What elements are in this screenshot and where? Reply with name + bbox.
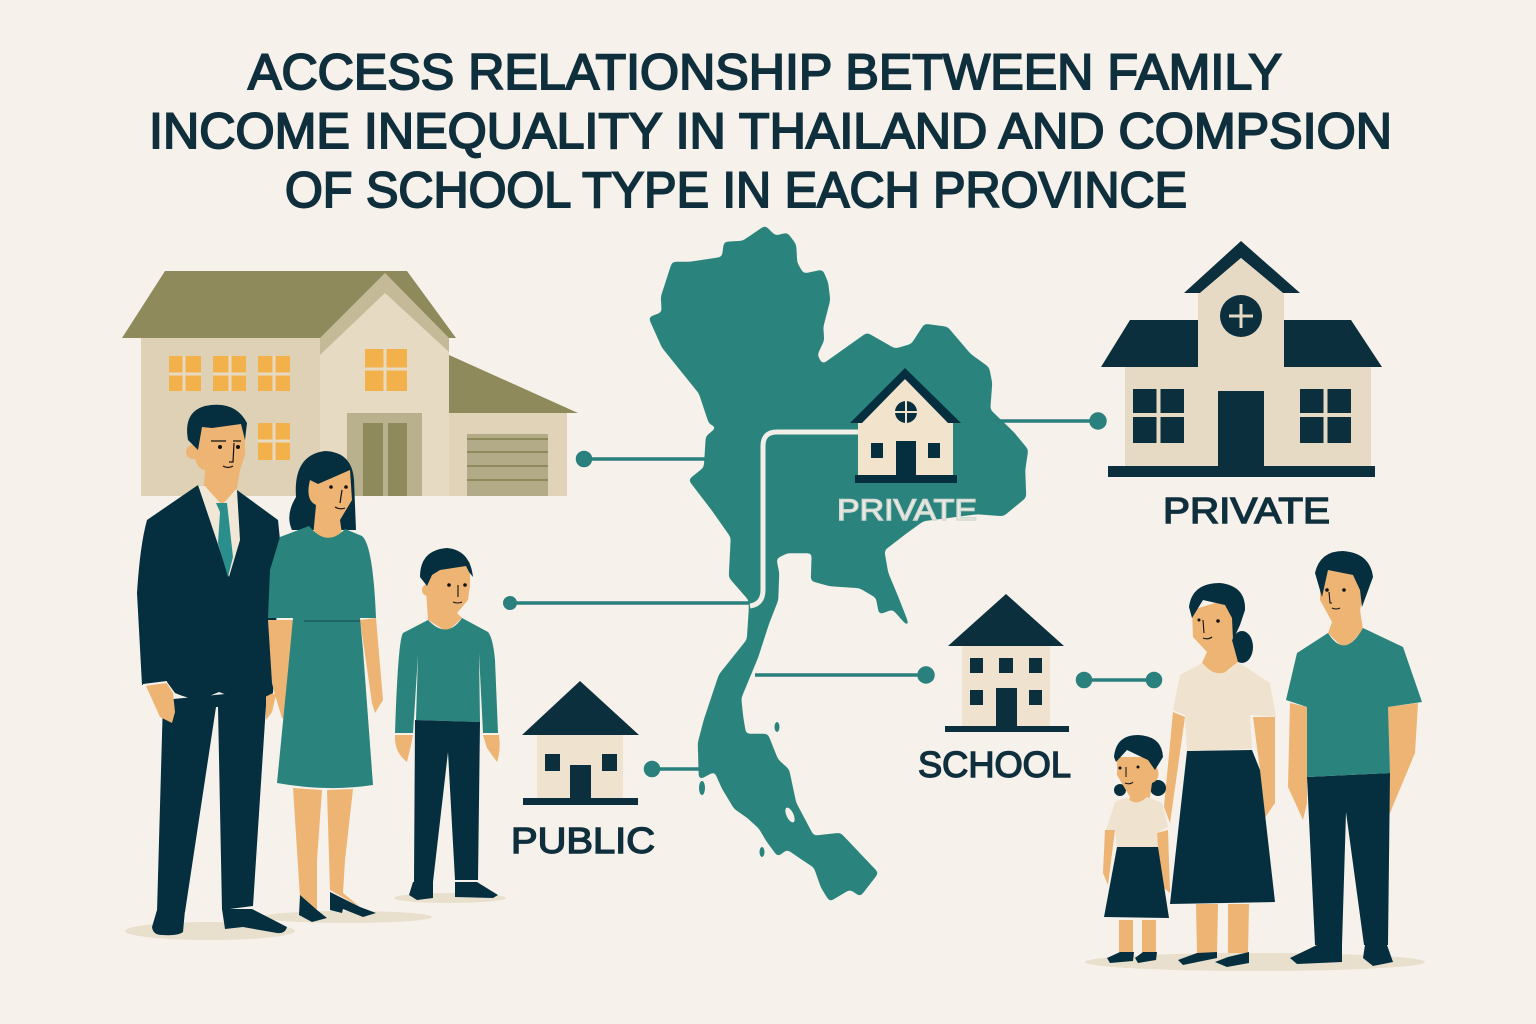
label: school: SCHOOL <box>918 744 1071 785</box>
title: OF SCHOOL TYPE IN EACH PROVINCE <box>285 162 1187 218</box>
connector: public school to map <box>646 762 700 776</box>
map of Thailand <box>650 227 1027 900</box>
connector: school to lower family <box>1078 674 1160 686</box>
man in suit <box>137 405 287 935</box>
connector: child to map with white route <box>504 432 860 610</box>
icon: large private school <box>1101 241 1382 477</box>
icon: public school <box>522 681 639 805</box>
label: private on map: PRIVATE <box>837 494 977 527</box>
family: wealthy family <box>125 405 506 940</box>
icon: school building <box>945 594 1069 732</box>
boy <box>395 548 500 900</box>
family: lower income family <box>1085 551 1425 971</box>
lake on map <box>783 806 797 824</box>
girl <box>1103 735 1170 963</box>
connector: house to map <box>578 452 705 466</box>
title: INCOME INEQUALITY IN THAILAND AND COMPSION <box>149 103 1392 159</box>
label: public: PUBLIC <box>511 820 655 861</box>
connector: map to upper-right private school <box>994 414 1105 428</box>
father <box>1286 551 1422 966</box>
woman in teal dress <box>268 451 383 922</box>
map islands <box>699 722 780 857</box>
label: private: PRIVATE <box>1163 490 1330 531</box>
title: ACCESS RELATIONSHIP BETWEEN FAMILY <box>248 44 1282 100</box>
connector: map to school <box>755 668 933 682</box>
mother <box>1164 583 1276 967</box>
title <box>149 44 1392 218</box>
icon: private school on map <box>850 368 961 483</box>
house windows <box>169 349 407 460</box>
large family house <box>122 271 578 496</box>
